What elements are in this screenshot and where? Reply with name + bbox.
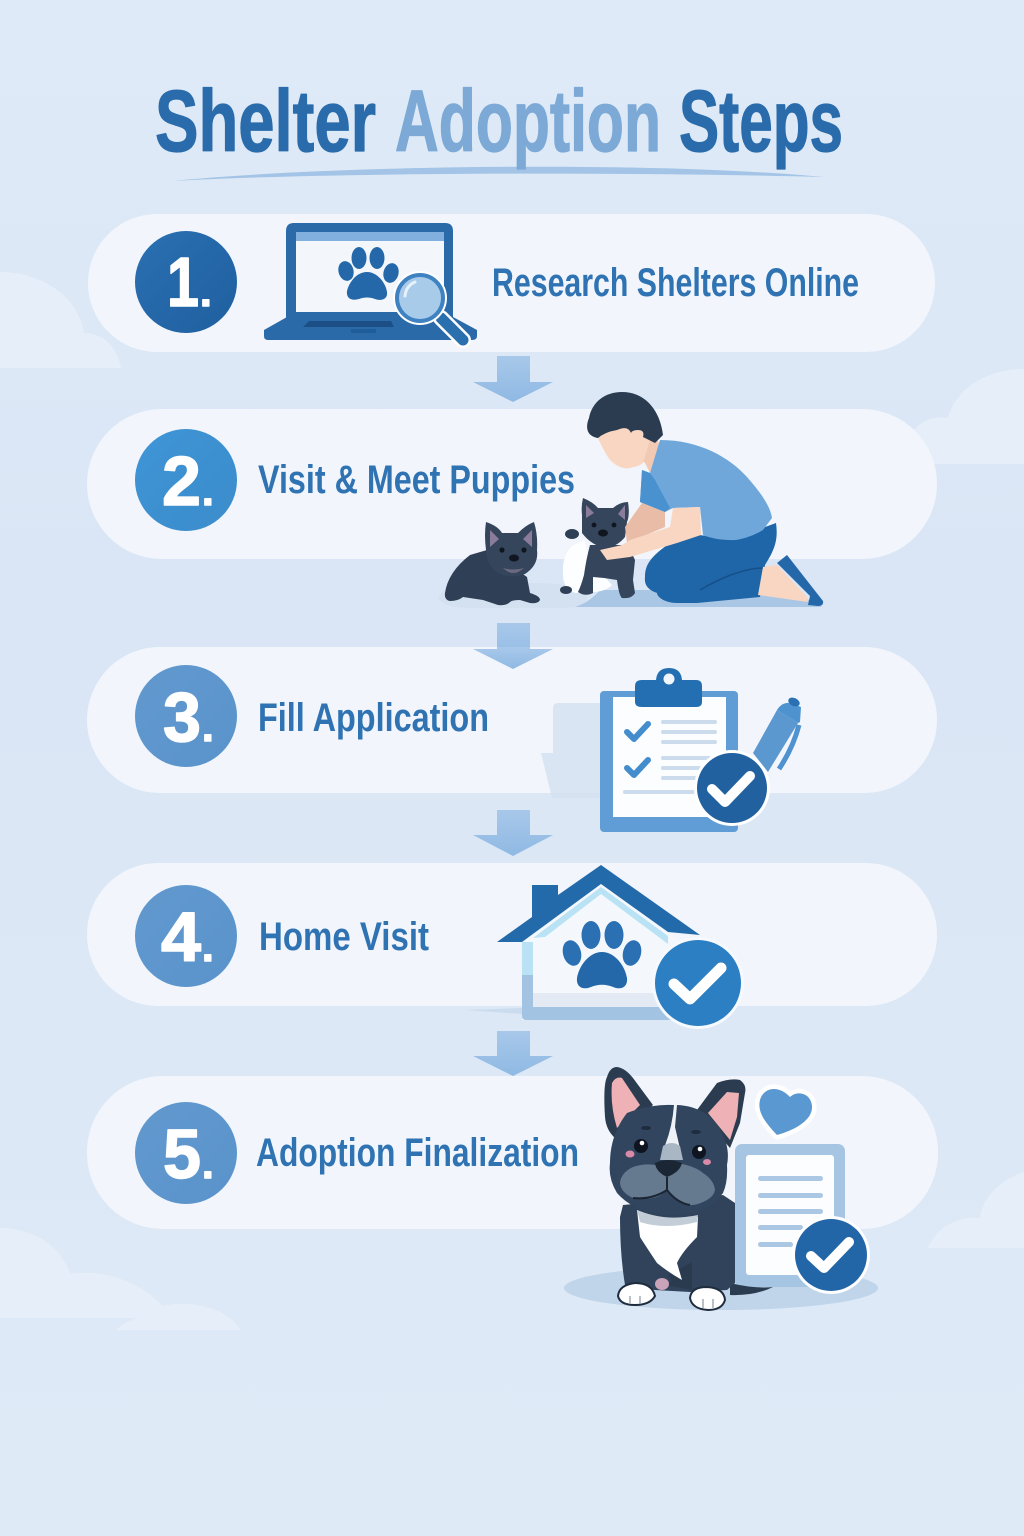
arrow 2 to 3 [473, 623, 553, 669]
title [155, 73, 843, 170]
step 5 number badge: . [202, 1140, 214, 1187]
icon: adoption document [735, 1144, 845, 1287]
step 5 panel [87, 1076, 938, 1229]
step 2 number badge: . [202, 467, 214, 514]
step 1 label: Research Shelters Online [492, 261, 859, 305]
step 4 number badge: 4 [161, 898, 201, 976]
icon: document check badge [792, 1216, 870, 1294]
arrow 1 to 2 [473, 356, 553, 402]
icon: pen [753, 696, 801, 772]
icon: home check badge [652, 937, 744, 1029]
step 1 number badge: 1 [167, 243, 199, 321]
step 1 number badge [135, 231, 237, 333]
step 4 number badge: . [202, 923, 214, 970]
icon: heart [759, 1089, 812, 1135]
step 1 number badge: . [200, 268, 212, 315]
arrow 3 to 4 [473, 810, 553, 856]
step 3 panel [87, 647, 937, 793]
step 3 number badge: . [202, 703, 214, 750]
arrow tip over panel [473, 647, 553, 669]
title underline [173, 167, 824, 181]
step 5 number badge: 5 [163, 1115, 201, 1193]
floor shadow under person [575, 590, 822, 607]
step 5 label: Adoption Finalization [256, 1131, 579, 1175]
step 2 number badge: 2 [162, 442, 201, 520]
step 2 panel [87, 409, 937, 559]
icon: house with paw [465, 865, 700, 1020]
arrow 4 to 5 [473, 1031, 553, 1076]
icon: faded folder [541, 703, 622, 798]
floor shadow under dog [564, 1266, 878, 1310]
title: Adoption [395, 73, 661, 170]
title: Steps [679, 73, 843, 170]
step 4 label: Home Visit [259, 915, 429, 959]
step 3 number badge: 3 [163, 678, 201, 756]
step 1 panel [88, 214, 935, 352]
step 4 number badge [135, 885, 237, 987]
step 5 number badge [135, 1102, 237, 1204]
title: Shelter [155, 73, 376, 170]
icon: laptop with paw and magnifier [264, 223, 477, 340]
step 2 number badge [135, 429, 237, 531]
step 4 panel [87, 863, 937, 1006]
illustration: puppy held by person [560, 498, 635, 598]
icon: clipboard with checklist [600, 668, 738, 832]
icon: check badge [694, 750, 770, 826]
step 3 number badge [135, 665, 237, 767]
illustration: puppy lying [445, 522, 540, 605]
clouds [0, 272, 1024, 1330]
floor shadow [438, 583, 587, 608]
illustration: french bulldog [604, 1067, 773, 1310]
illustration: person kneeling [587, 392, 823, 606]
step 3 label: Fill Application [258, 696, 489, 740]
step 2 label: Visit & Meet Puppies [258, 458, 575, 502]
